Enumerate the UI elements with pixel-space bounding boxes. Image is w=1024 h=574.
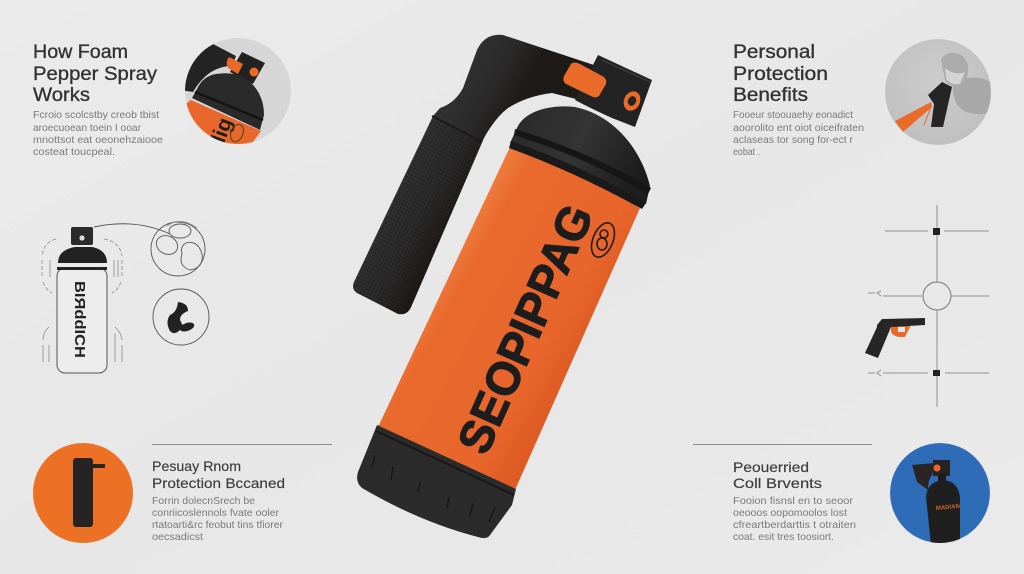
- motion dashes: [42, 239, 122, 362]
- description: Fooeur stoouaehy eonadict: [733, 109, 853, 121]
- image: blue circle with canister: [890, 443, 990, 545]
- heading: [152, 458, 285, 491]
- description: aoorolito ent oiot oiceifraten: [733, 122, 864, 134]
- image: person using spray: [885, 39, 992, 145]
- heading: [733, 459, 822, 491]
- nozzle head: [563, 55, 652, 127]
- canister outline: BIЯddICH: [71, 281, 88, 358]
- diagram: crosshair with pistol sprayer: [865, 205, 989, 407]
- orange switch: [563, 62, 606, 97]
- description: [733, 495, 856, 543]
- panel: pepay room protection: [33, 443, 332, 543]
- small logo on canister: [587, 220, 619, 260]
- marker bottom: [933, 370, 940, 376]
- crosshair circle: [923, 282, 951, 310]
- domed cap: [509, 106, 651, 209]
- description: eobat .: [733, 146, 760, 158]
- image: canister close-up: [185, 38, 291, 144]
- panel: powered coil events: [693, 443, 990, 545]
- heading: Peouerried: [733, 459, 809, 475]
- description: costeat toucpeal.: [33, 146, 115, 158]
- heading: How Foam: [33, 41, 128, 63]
- image: blue circle with canister: MADIAN: [936, 504, 960, 512]
- description: Forrin dolecnSrech be: [152, 495, 255, 507]
- icon: flame in circle: [153, 289, 209, 345]
- description: [152, 495, 283, 543]
- description: Fooion fisnsl en to seoor: [733, 495, 854, 507]
- description: aroecuoean toein I ooar: [33, 122, 141, 134]
- description: conriicoslennols fvate ooler: [152, 507, 279, 519]
- canister body: [378, 147, 640, 490]
- description: cfreartberdarttis t otraiten: [733, 519, 856, 531]
- icon: pistol sprayer: [865, 318, 925, 358]
- description: mnottsot eat oeonehzaiooe: [33, 134, 163, 146]
- description: aclaseas tor song for-ect r: [733, 134, 853, 146]
- orange dial: [621, 89, 643, 113]
- description: rtatoarti&rc feobut tins tfiorer: [152, 519, 283, 531]
- image: canister close-up: lig: [207, 115, 237, 146]
- foam bubbles callout: [94, 221, 205, 276]
- heading: Protection: [733, 63, 828, 85]
- panel: personal protection benefits: [733, 39, 992, 158]
- heading: Protection Bccaned: [152, 475, 285, 491]
- divider: [152, 444, 332, 445]
- description: oeooos oopomoolos lost: [733, 507, 847, 519]
- description: [33, 109, 163, 158]
- heading: [733, 41, 828, 106]
- canister base: [357, 425, 516, 538]
- heading: Pesuay Rnom: [152, 458, 241, 474]
- description: oecsadicst: [152, 531, 203, 543]
- crosshair lines: [868, 205, 989, 407]
- icon: orange circle with canister: [33, 443, 133, 543]
- marker top: [933, 228, 940, 235]
- divider: [693, 444, 872, 445]
- description: Fcroio scolcstby creob tbist: [33, 109, 159, 121]
- brand name on canister: SEOPIPPAG: [447, 197, 603, 461]
- heading: Pepper Spray: [33, 63, 157, 85]
- description: coat. esit tres toosiort.: [733, 531, 834, 543]
- heading: [33, 41, 157, 106]
- heading: Coll Brvents: [733, 475, 822, 491]
- canister outline: [57, 227, 107, 373]
- heading: Personal: [733, 41, 815, 63]
- panel: how foam pepper spray works: [33, 38, 291, 160]
- diagram: line-art canister: [42, 221, 209, 373]
- heading: Works: [33, 84, 90, 106]
- handle and grip: [353, 35, 600, 314]
- heading: Benefits: [733, 84, 808, 106]
- main pepper spray canister: [353, 35, 652, 538]
- description: [733, 109, 864, 158]
